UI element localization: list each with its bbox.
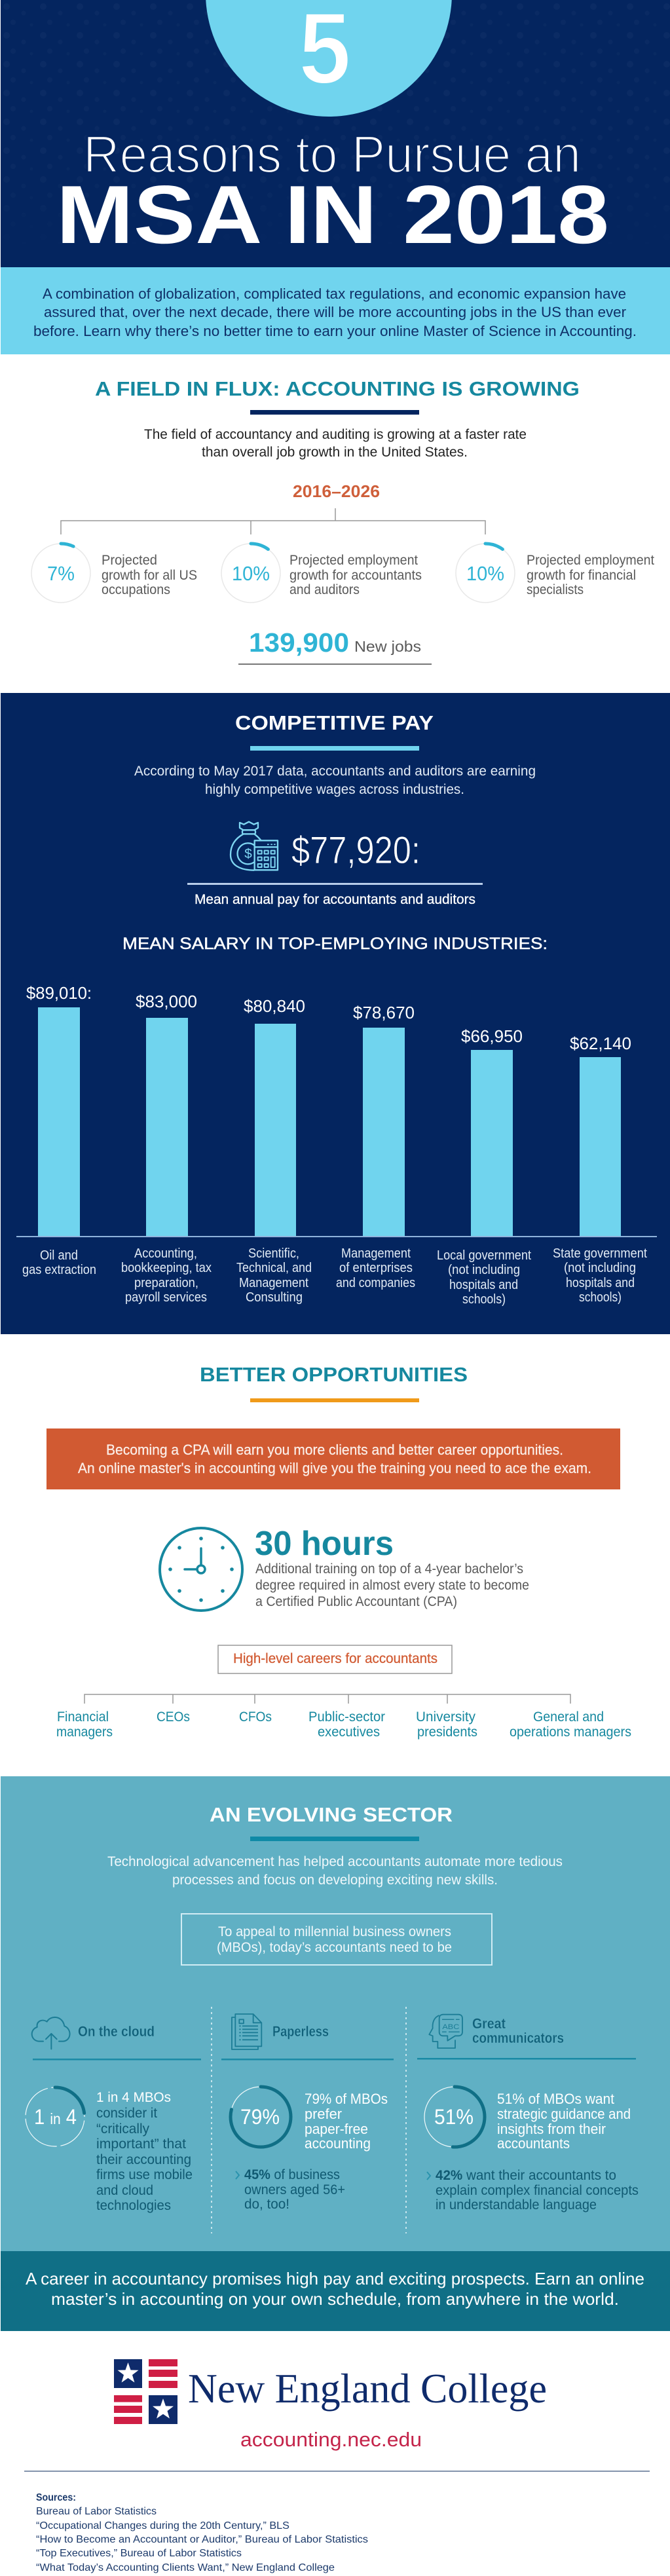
career labels: operations managers <box>510 1725 631 1740</box>
stat: new jobs: New jobs <box>354 638 421 655</box>
icon: clock <box>160 1528 242 1611</box>
stat: seven percent: Projected <box>102 553 157 568</box>
panel: competitive pay <box>1 693 670 1334</box>
stat: ten percent financial specialists: Projected employment <box>527 553 654 568</box>
column: paperless <box>221 2014 394 2212</box>
callout: millennial business owners: To appeal to millennial business owners <box>218 1924 451 1939</box>
stat: new jobs <box>238 627 432 665</box>
heading: a field in flux: A FIELD IN FLUX: ACCOUNTING IS GROWING <box>95 377 580 400</box>
text: one in four: 1 in 4 MBOs <box>96 2089 171 2105</box>
icon: document <box>232 2014 261 2049</box>
donut: seventy-nine percent: 79% <box>240 2105 280 2129</box>
stat: thirty hours: a Certified Public Accountant (CPA) <box>255 1594 457 1609</box>
bar: state government: State government <box>553 1246 647 1261</box>
panel: closing call to action: master’s in accounting on your own schedule, from anywhere in the world. <box>51 2289 619 2309</box>
mean pay figure: $77,920: <box>291 829 420 872</box>
text: fifty-one percent: accountants <box>497 2135 570 2152</box>
text: seventy-nine percent: paper-free <box>305 2121 368 2137</box>
stat: thirty hours: degree required in almost every state to become <box>255 1578 529 1593</box>
panel: intro band: before. Learn why there’s no better time to earn your online Master of Science in Accounting. <box>33 323 637 339</box>
bar: local government: schools) <box>462 1292 506 1307</box>
heading: an evolving sector: AN EVOLVING SECTOR <box>210 1803 453 1826</box>
donut: fifty-one percent <box>424 2087 485 2147</box>
icon: money bag and calculator: $ <box>244 846 252 861</box>
column: great communicators <box>417 2015 639 2212</box>
bar: state government: hospitals and <box>566 1275 635 1290</box>
bar: accounting <box>121 992 212 1305</box>
bullet: business owners: do, too! <box>244 2196 289 2212</box>
stat: seven percent: 7% <box>47 562 75 585</box>
bar chart: salaries <box>16 983 657 1307</box>
bar: accounting: $83,000 <box>136 992 197 1011</box>
panel: closing call to action <box>1 2251 670 2331</box>
bar: local government: (not including <box>448 1262 520 1277</box>
text: seventy-nine percent: prefer <box>305 2106 342 2122</box>
bar: local government <box>437 1026 531 1307</box>
stat: ten percent financial specialists: growth for financial <box>527 568 636 583</box>
career labels: managers <box>56 1725 113 1740</box>
bar: accounting: bookkeeping, tax <box>121 1260 212 1275</box>
heading: competitive pay: COMPETITIVE PAY <box>235 711 434 734</box>
icon: cloud <box>32 2017 70 2049</box>
callout: millennial business owners <box>181 1914 492 1965</box>
tree connector: growth <box>61 508 485 534</box>
callout: CPA banner <box>47 1428 620 1489</box>
bar: scientific: $80,840 <box>244 996 305 1016</box>
label: great communicators: Great <box>472 2015 506 2032</box>
stat: ten percent accountants: growth for accountants <box>289 568 422 583</box>
bar: management <box>336 1003 415 1290</box>
career labels: Financial <box>57 1709 109 1725</box>
stat: ten percent financial specialists: specialists <box>527 582 584 597</box>
bullet: business owners: owners aged 56+ <box>244 2182 345 2197</box>
text block: sources: Bureau of Labor Statistics <box>36 2506 157 2517</box>
panel: intro band: assured that, over the next decade, there will be more accounting jobs in the US than ever <box>44 304 626 320</box>
text block: evolving intro: Technological advancement has helped accountants automate more tedious <box>107 1854 563 1869</box>
bar: state government: $62,140 <box>570 1034 631 1053</box>
icon: head with ABC: ABC <box>442 2023 459 2031</box>
text block: growth intro: The field of accountancy and auditing is growing at a faster rate <box>144 427 527 442</box>
bullet: business owners <box>236 2167 345 2212</box>
website link text: accounting.nec.edu <box>240 2428 422 2451</box>
text: seventy-nine percent: 79% of MBOs <box>305 2091 388 2107</box>
bar: state government: (not including <box>564 1260 636 1275</box>
bar: local government: $66,950 <box>461 1026 523 1046</box>
bullet: financial concepts: in understandable language <box>436 2197 597 2212</box>
text: one in four: their accounting <box>96 2152 191 2167</box>
mean pay caption: Mean annual pay for accountants and auditors <box>195 892 475 907</box>
heading: a field in flux <box>95 377 580 415</box>
heading: competitive pay <box>235 711 434 751</box>
heading: an evolving sector <box>210 1803 453 1841</box>
text block: sources: “Top Executives,” Bureau of Labor Statistics <box>36 2548 242 2559</box>
icon: head with ABC <box>429 2015 462 2048</box>
text: one in four: and cloud <box>96 2182 153 2198</box>
bar: state government: schools) <box>579 1290 622 1305</box>
wordmark: New England College <box>188 2365 547 2412</box>
bar: scientific: Consulting <box>246 1290 303 1305</box>
panel: header <box>1 0 670 267</box>
label box: high-level careers: High-level careers for accountants <box>233 1651 437 1666</box>
text block: pay intro <box>134 764 536 797</box>
callout: CPA banner: Becoming a CPA will earn you more clients and better career opportunities. <box>106 1442 563 1458</box>
donut: seventy-nine percent <box>231 2087 291 2147</box>
panel: intro band <box>1 267 670 354</box>
bar: scientific: Scientific, <box>248 1246 299 1261</box>
tree connector: careers <box>84 1694 570 1704</box>
stat: ten percent financial specialists: 10% <box>466 562 504 585</box>
column dividers <box>212 2007 406 2233</box>
text: one in four <box>96 2089 193 2213</box>
bullet: business owners: 45% of business <box>244 2167 340 2182</box>
bullet: financial concepts: 42% want their accountants to <box>436 2167 616 2183</box>
text: one in four: technologies <box>96 2197 171 2213</box>
career labels: Public-sector <box>308 1709 385 1725</box>
stat: ten percent financial specialists <box>456 544 654 603</box>
bullet: financial concepts: explain complex financial concepts <box>436 2182 639 2198</box>
bar: local government: Local government <box>437 1248 531 1263</box>
stat: seven percent: occupations <box>102 582 170 597</box>
callout: CPA banner: An online master's in accounting will give you the training you need to ace the exam. <box>78 1460 591 1476</box>
text block: sources: Sources: <box>36 2492 76 2503</box>
icon: money bag and calculator <box>231 822 278 870</box>
stat: ten percent accountants <box>221 544 422 603</box>
icon: number circle <box>206 0 452 117</box>
bar: oil and gas: Oil and <box>40 1248 78 1263</box>
text: fifty-one percent <box>497 2091 631 2152</box>
bar: oil and gas: $89,010: <box>26 983 92 1003</box>
stat: thirty hours: Additional training on top of a 4-year bachelor’s <box>255 1561 523 1577</box>
heading: better opportunities: BETTER OPPORTUNITIES <box>200 1363 468 1386</box>
text block: growth intro <box>144 427 527 460</box>
career labels <box>56 1709 631 1740</box>
bar: oil and gas <box>22 983 96 1277</box>
stat: new jobs: 139,900 <box>249 627 349 658</box>
career labels: CEOs <box>157 1709 190 1725</box>
text: one in four: firms use mobile <box>96 2167 193 2182</box>
stat: ten percent accountants: Projected employment <box>289 553 418 568</box>
bar: local government: hospitals and <box>449 1277 518 1292</box>
bar: oil and gas: gas extraction <box>22 1262 96 1277</box>
text block: sources: “What Today’s Accounting Clients Want,” New England College <box>36 2562 335 2573</box>
bullet: financial concepts <box>427 2167 639 2212</box>
column: on the cloud <box>26 2017 201 2213</box>
career labels: University <box>416 1709 475 1725</box>
bar: accounting: Accounting, <box>134 1246 197 1261</box>
label: on the cloud: On the cloud <box>78 2023 155 2040</box>
text: one in four: consider it <box>96 2105 157 2121</box>
donut: one in four: 1 in 4 <box>34 2105 77 2129</box>
panel: closing call to action: A career in accountancy promises high pay and exciting prospects. Earn an online <box>26 2269 644 2288</box>
text: one in four: important” that <box>96 2136 186 2152</box>
stat: thirty hours: 30 hours <box>255 1525 394 1563</box>
text block: pay intro: According to May 2017 data, accountants and auditors are earning <box>134 764 536 779</box>
icon: flag squares <box>114 2359 177 2424</box>
label: great communicators <box>472 2015 564 2046</box>
donut: one in four <box>26 2087 84 2146</box>
text: fifty-one percent: insights from their <box>497 2121 606 2137</box>
callout: millennial business owners: (MBOs), today’s accountants need to be <box>217 1940 452 1955</box>
bar: accounting: payroll services <box>125 1290 207 1305</box>
bar: scientific <box>236 996 312 1305</box>
text: fifty-one percent: strategic guidance and <box>497 2106 631 2122</box>
career labels: presidents <box>417 1725 477 1740</box>
text: seventy-nine percent: accounting <box>305 2135 371 2152</box>
text: seventy-nine percent <box>305 2091 388 2152</box>
career labels: executives <box>318 1725 380 1740</box>
bar: accounting: preparation, <box>134 1275 198 1290</box>
text: one in four: “critically <box>96 2121 149 2137</box>
text: fifty-one percent: 51% of MBOs want <box>497 2091 614 2107</box>
logo: New England College <box>114 2359 547 2424</box>
text block: sources: “How to Become an Accountant or Auditor,” Bureau of Labor Statistics <box>36 2534 368 2545</box>
stat: ten percent accountants: and auditors <box>289 582 360 597</box>
text block: evolving intro <box>107 1854 563 1888</box>
bar: state government <box>553 1034 647 1305</box>
text block: sources <box>36 2492 368 2573</box>
heading: better opportunities <box>200 1363 468 1402</box>
donut: fifty-one percent: 51% <box>434 2105 474 2129</box>
heading: mean salary: MEAN SALARY IN TOP-EMPLOYING INDUSTRIES: <box>122 935 548 953</box>
stat: thirty hours <box>255 1525 529 1609</box>
career labels: General and <box>533 1709 604 1725</box>
bar: management: Management <box>341 1246 411 1261</box>
title line one: Reasons to Pursue an <box>83 125 581 183</box>
bar: management: $78,670 <box>353 1003 415 1022</box>
bar: scientific: Management <box>239 1275 308 1290</box>
text block: sources: “Occupational Changes during the 20th Century,” BLS <box>36 2520 289 2531</box>
date range label: 2016–2026 <box>293 481 380 501</box>
stat: seven percent: growth for all US <box>102 568 197 583</box>
stat: ten percent accountants: 10% <box>232 562 270 585</box>
text block: pay intro: highly competitive wages across industries. <box>205 782 464 797</box>
career labels: CFOs <box>239 1709 272 1725</box>
title line two: MSA IN 2018 <box>56 168 609 261</box>
text block: growth intro: than overall job growth in the United States. <box>202 445 468 460</box>
bar: management: of enterprises <box>339 1260 413 1275</box>
panel: intro band: A combination of globalization, complicated tax regulations, and economic expansion have <box>43 286 626 302</box>
text block: evolving intro: processes and focus on developing exciting new skills. <box>172 1873 498 1888</box>
label: paperless: Paperless <box>272 2023 329 2040</box>
bar: management: and companies <box>336 1275 415 1290</box>
panel: evolving sector <box>1 1776 670 2251</box>
label box: high-level careers <box>218 1645 452 1673</box>
stat: seven percent <box>31 544 197 603</box>
bar: scientific: Technical, and <box>236 1260 312 1275</box>
mean pay caption <box>187 883 483 907</box>
label: great communicators: communicators <box>472 2030 564 2046</box>
